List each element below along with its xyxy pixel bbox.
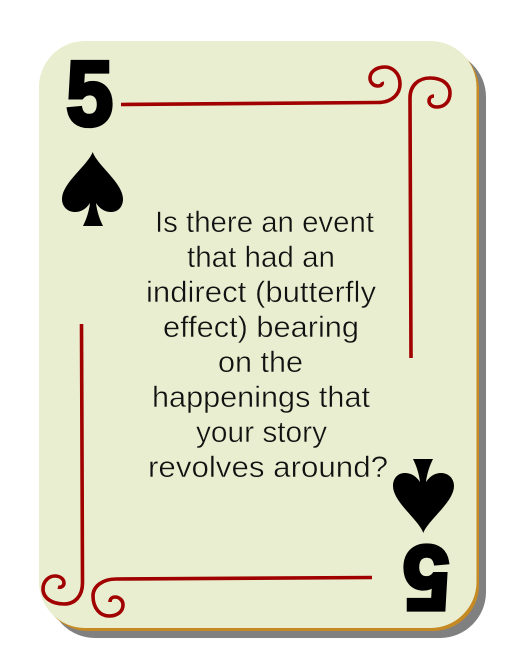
suit: bottom spade [393,459,454,533]
right ornament line with spiral [410,78,450,358]
question text: Is there an event [155,206,375,239]
question text: on the [218,346,303,379]
rank: bottom 5: 5 [403,527,450,630]
top ornament line with spiral [121,67,400,104]
suit: top spade [62,152,123,226]
question text: effect) bearing [163,311,359,344]
rank: top 5: 5 [66,42,113,145]
question text: that had an [187,241,335,274]
question text: indirect (butterfly [146,276,376,309]
card gold edge [42,44,479,631]
card face [39,41,476,628]
question text [146,206,388,484]
card shadow [49,51,486,638]
question text: revolves around? [148,451,388,484]
question text: your story [196,416,327,449]
question text: happenings that [152,381,371,414]
bottom ornament line with spiral [93,578,372,616]
left ornament line with spiral [43,324,82,604]
